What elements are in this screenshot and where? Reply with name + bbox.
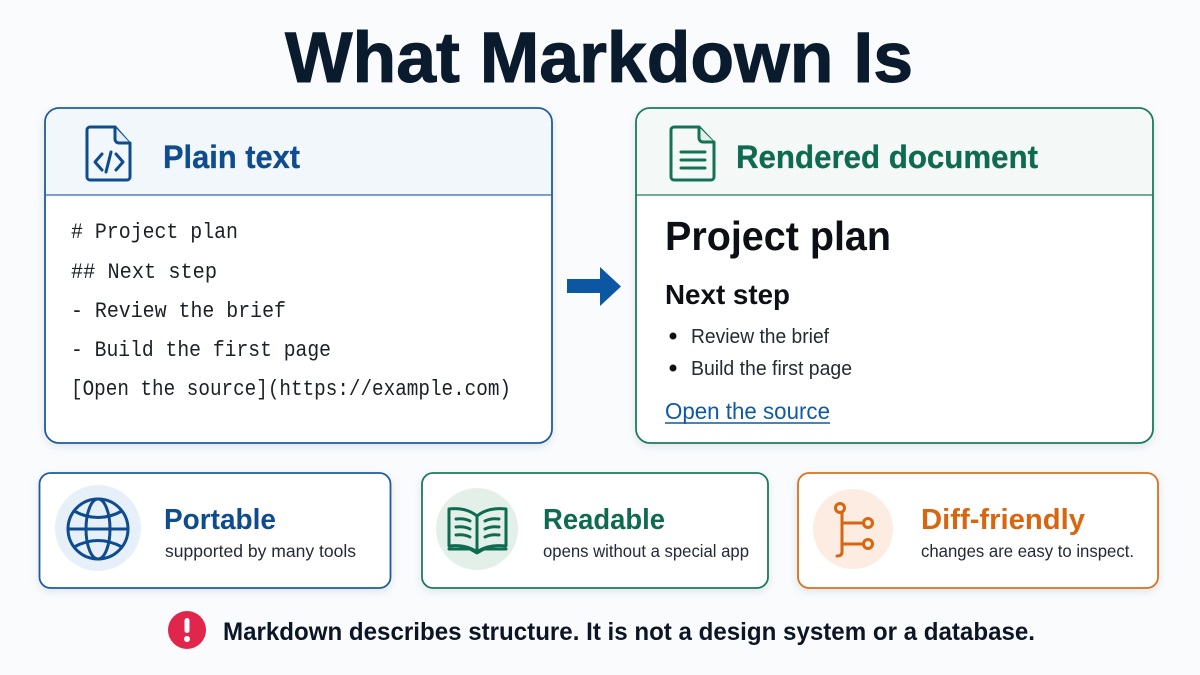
code sample: - Build the first page [71,338,331,363]
icon: globe [55,485,141,571]
card: portable [40,473,390,588]
card title: diff-friendly: Diff-friendly [921,504,1085,536]
card text: diff-friendly: changes are easy to inspect. [921,541,1134,561]
icon: alert [168,611,206,649]
code sample: [Open the source](https://example.com) [71,377,511,402]
arrow [567,267,621,306]
rendered bullet list: Review the brief [691,326,829,348]
icon: branch diff [813,489,893,569]
code sample: - Review the brief [71,299,286,324]
card title: portable: Portable [164,504,276,536]
panel: plain text [45,108,552,443]
heading: rendered document: Rendered document [736,139,1038,175]
panel: rendered document [636,108,1153,443]
icon: code file [87,127,130,180]
card title: readable: Readable [543,504,665,536]
card text: readable: opens without a special app [543,541,749,561]
code sample: # Project plan [71,220,238,245]
icon: open book [436,488,518,570]
panel header: rendered document [637,109,1152,195]
rendered bullet list: Build the first page [691,358,852,380]
icon: document [671,127,714,180]
code sample: ## Next step [71,260,217,285]
card: diff-friendly [798,473,1158,588]
title: What Markdown Is [285,19,913,98]
card: readable [422,473,768,588]
callout: Markdown describes structure. It is not a design system or a database. [223,618,1035,646]
card text: portable: supported by many tools [165,541,356,561]
rendered heading 2: Next step [665,279,790,310]
rendered bullet list [670,326,852,380]
code sample [71,220,511,402]
panel header: plain text [46,109,551,195]
rendered heading 1: Project plan [665,213,891,259]
rendered link: Open the source [665,398,830,424]
heading: plain text: Plain text [163,139,300,175]
